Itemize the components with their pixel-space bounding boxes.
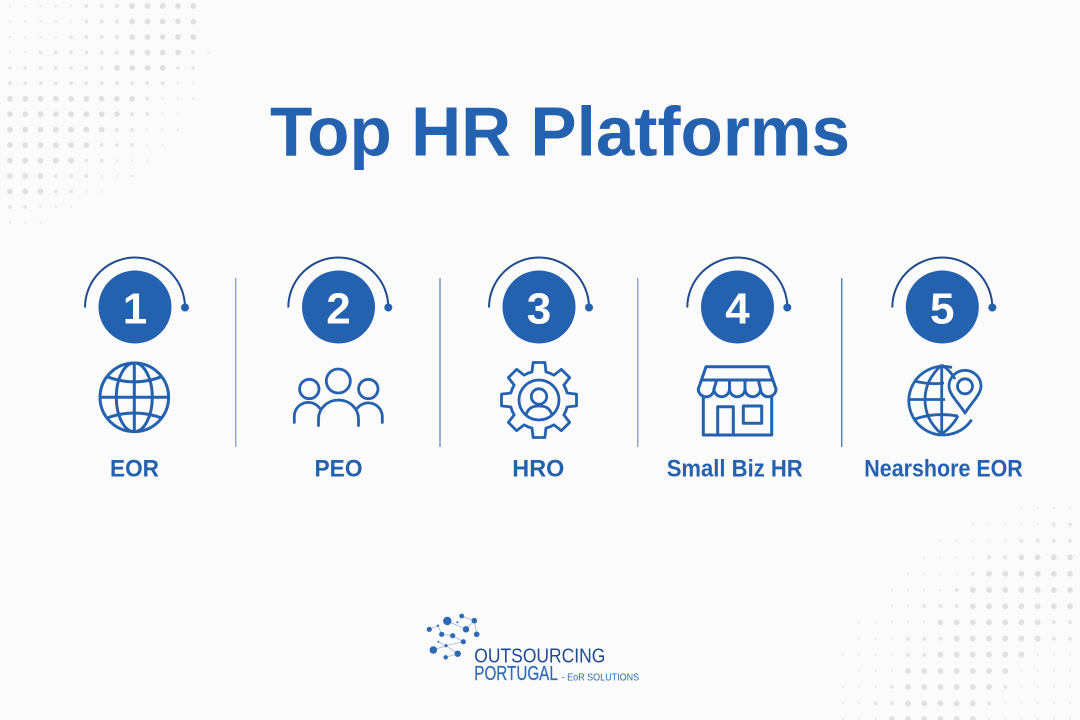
label: Small Biz HR: Small Biz HR — [667, 456, 803, 483]
logo: Outsourcing Portugal — [427, 614, 639, 685]
number badge 1 — [85, 258, 189, 344]
column 3: HRO — [489, 258, 593, 483]
number badge 3 — [489, 258, 593, 344]
label: PEO: PEO — [314, 456, 362, 483]
number badge 1: 1 — [123, 284, 147, 334]
label: EOR: EOR — [110, 456, 159, 483]
icon: globe with location pin — [908, 365, 981, 435]
column 4: Small Biz HR — [667, 258, 803, 483]
title: Top HR Platforms — [270, 93, 850, 171]
icon: gear with person — [502, 362, 576, 438]
divider lines between columns — [236, 278, 842, 447]
column 5: Nearshore EOR — [864, 258, 1023, 483]
number badge 4 — [687, 258, 791, 344]
number badge 5 — [892, 258, 996, 344]
number badge 2: 2 — [326, 284, 351, 334]
icon: globe — [100, 363, 169, 432]
logo text: PORTUGAL: PORTUGAL — [474, 663, 558, 685]
logo mark: network of dots — [427, 614, 480, 660]
number badge 2 — [288, 258, 392, 344]
label: HRO: HRO — [512, 456, 564, 483]
number badge 5: 5 — [930, 284, 955, 334]
logo text: OUTSOURCING: OUTSOURCING — [474, 645, 605, 667]
icon: people group — [294, 369, 382, 426]
number badge 4: 4 — [725, 284, 750, 334]
icon: storefront — [698, 367, 776, 435]
label: Nearshore EOR: Nearshore EOR — [864, 456, 1023, 483]
column 1: EOR — [85, 258, 189, 483]
logo text: EoR Solutions: - EoR SOLUTIONS — [562, 672, 639, 683]
number badge 3: 3 — [527, 284, 551, 334]
column 2: PEO — [288, 258, 392, 483]
